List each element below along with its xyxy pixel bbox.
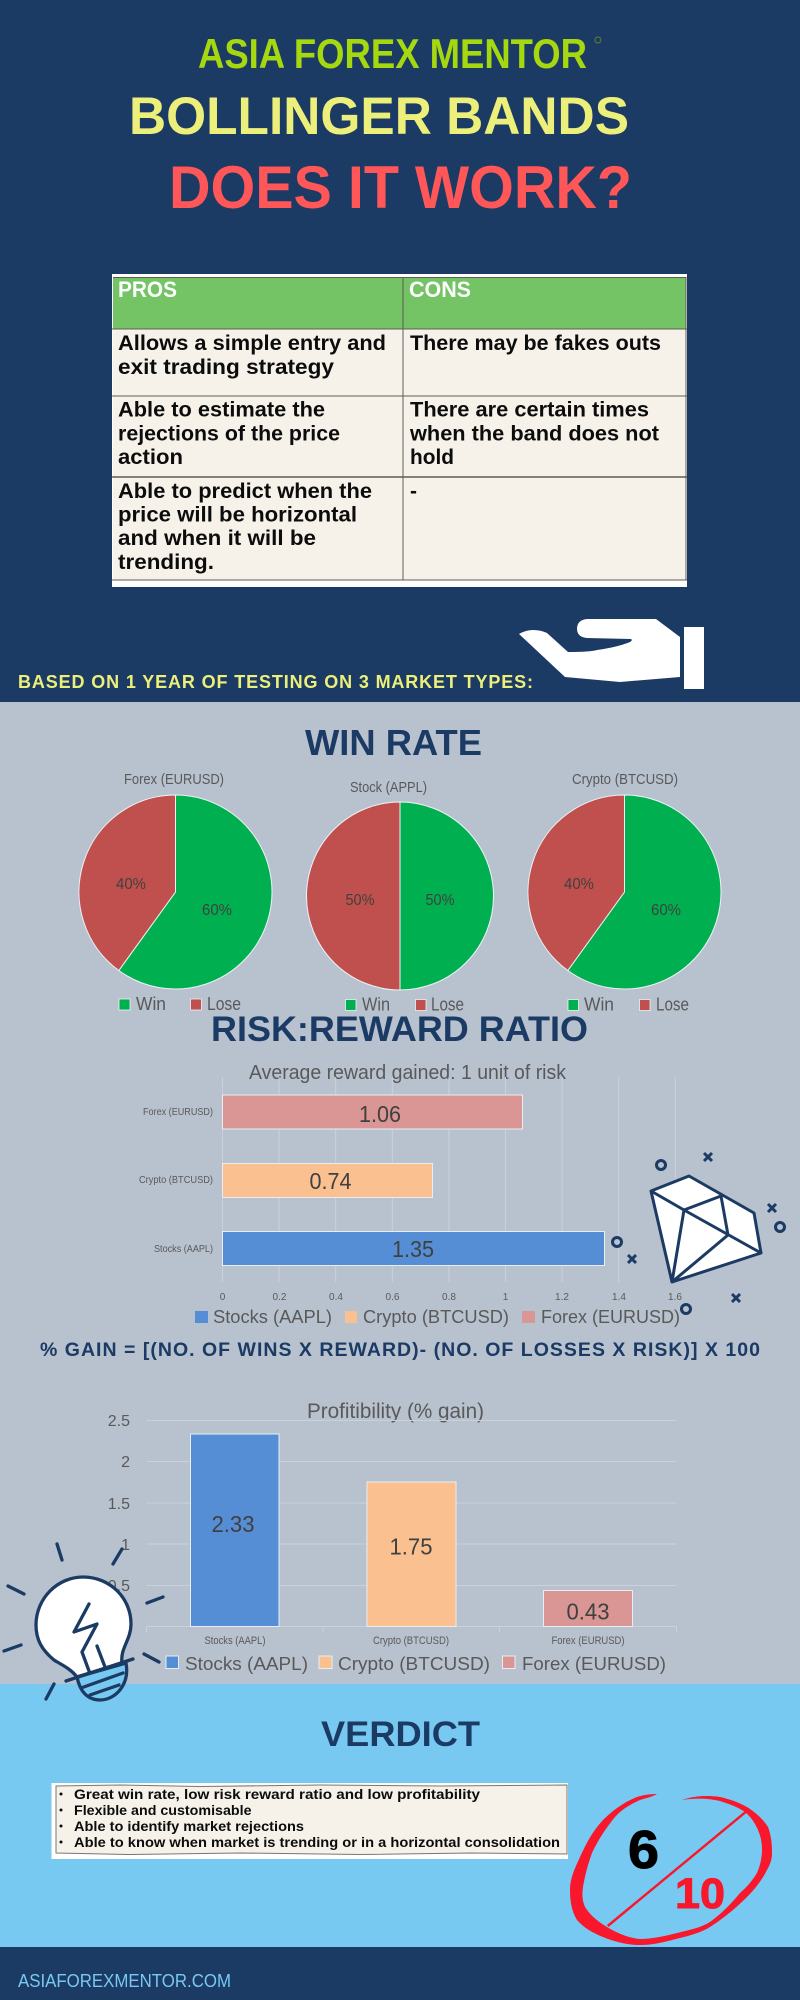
text box: verdict points: Great win rate, low risk reward ratio and low profitability — [74, 1786, 480, 1802]
panel: header background — [0, 0, 800, 702]
bar chart: average reward gained: Stocks (AAPL) — [154, 1243, 213, 1255]
pie chart: Crypto: Crypto (BTCUSD) — [572, 771, 678, 788]
text box: verdict points: Flexible and customisable — [74, 1802, 252, 1818]
title: Bollinger Bands: BOLLINGER BANDS — [129, 87, 629, 146]
heading: win rate: WIN RATE — [305, 722, 482, 763]
bar chart: profitability: Crypto (BTCUSD) — [373, 1635, 449, 1647]
bar chart: profitability: Stocks (AAPL) — [185, 1654, 308, 1674]
bar chart: profitability: 0.43 — [566, 1598, 610, 1624]
bar chart: profitability: Forex (EURUSD) — [552, 1635, 624, 1647]
panel: verdict background — [0, 1684, 800, 1947]
bar chart: profitability: Forex (EURUSD) — [522, 1654, 666, 1674]
pie chart: Stock — [306, 779, 494, 1014]
bar chart: profitability: Profitibility (% gain) — [307, 1400, 484, 1423]
bar chart: profitability: 1.5 — [108, 1496, 130, 1513]
pie chart: Crypto: 40% — [564, 876, 594, 893]
panel: results background — [0, 702, 800, 1684]
pie chart: Stock: 50% — [426, 892, 454, 909]
score: 6 out of 10 — [570, 1794, 772, 1945]
pie chart: Stock: Stock (APPL) — [350, 779, 427, 796]
pie chart: Crypto: 60% — [651, 902, 681, 919]
bar chart: average reward gained: 1.6 — [668, 1292, 682, 1303]
bar chart: average reward gained: 0.6 — [386, 1292, 400, 1303]
bar chart: average reward gained: Forex (EURUSD) — [541, 1307, 680, 1327]
table: pros and cons: trending. — [118, 551, 214, 574]
pie chart: Crypto: Win — [584, 994, 614, 1014]
bar chart: average reward gained: 0.8 — [442, 1292, 456, 1303]
heading: verdict: VERDICT — [321, 1715, 480, 1754]
table: pros and cons: hold — [410, 446, 454, 469]
pie chart: Forex: 40% — [116, 876, 146, 893]
text box: verdict points: Able to know when market is trending or in a horizontal consolidation — [74, 1834, 560, 1850]
bar chart: average reward gained: Crypto (BTCUSD) — [139, 1174, 213, 1186]
table: pros and cons: price will be horizontal — [118, 504, 357, 526]
score: 6 out of 10: 6 — [628, 1820, 659, 1880]
table: pros and cons: Able to predict when the — [118, 480, 372, 503]
table: pros and cons: Able to estimate the — [118, 398, 325, 422]
table: pros and cons: rejections of the price — [118, 422, 340, 446]
bar chart: profitability: 1 — [121, 1537, 130, 1554]
pie chart: Forex: Forex (EURUSD) — [124, 771, 224, 788]
table: pros and cons: when the band does not — [409, 422, 659, 446]
pie chart: Forex — [79, 771, 272, 1014]
bar chart: average reward gained: Stocks (AAPL) — [213, 1307, 332, 1327]
table: pros and cons: action — [118, 446, 183, 469]
table: pros and cons: There are certain times — [410, 398, 649, 422]
bar chart: profitability: 2.5 — [108, 1413, 130, 1430]
text: based on testing: BASED ON 1 YEAR OF TESTING ON 3 MARKET TYPES: — [18, 672, 533, 692]
bar chart: average reward gained: 0.4 — [329, 1292, 343, 1303]
panel: footer background — [0, 1947, 800, 2000]
bar chart: profitability: 1.75 — [390, 1534, 432, 1560]
heading: risk reward ratio: RISK:REWARD RATIO — [211, 1010, 588, 1049]
bar chart: average reward gained: 0 — [220, 1292, 226, 1303]
bar chart: average reward gained: 1.06 — [359, 1101, 401, 1127]
table: pros and cons: - — [410, 480, 417, 503]
pie chart: Forex: Win — [136, 994, 166, 1014]
bar chart: average reward gained: Crypto (BTCUSD) — [363, 1307, 509, 1327]
score: 6 out of 10: 10 — [675, 1870, 725, 1918]
bar chart: profitability: Stocks (AAPL) — [204, 1635, 266, 1647]
bar chart: profitability: Crypto (BTCUSD) — [338, 1654, 490, 1674]
bar chart: average reward gained: Average reward gained: 1 unit of risk — [249, 1062, 567, 1084]
table: pros and cons: and when it will be — [118, 527, 316, 550]
pie chart: Crypto: Lose — [656, 994, 689, 1014]
icon: light bulb — [4, 1544, 163, 1700]
logo: Asia Forex Mentor: ASIA FOREX MENTOR — [198, 30, 587, 77]
text box: verdict points — [52, 1783, 568, 1859]
pie chart: Stock: 50% — [346, 892, 374, 909]
pie chart: Forex: Lose — [207, 994, 241, 1014]
pie chart: Stock: Lose — [431, 994, 464, 1014]
pie chart: Crypto — [528, 771, 721, 1014]
bar chart: profitability: 0.5 — [108, 1578, 130, 1595]
title: Does it work: DOES IT WORK? — [169, 154, 632, 221]
table: pros and cons: exit trading strategy — [118, 356, 334, 379]
text box: verdict points: Able to identify market rejections — [74, 1818, 304, 1834]
icon: open hand — [519, 619, 704, 689]
table: pros and cons: CONS — [409, 277, 471, 302]
footer: website: ASIAFOREXMENTOR.COM — [18, 1971, 231, 1991]
bar chart: average reward gained: Forex (EURUSD) — [143, 1106, 213, 1118]
bar chart: average reward gained: 0.2 — [273, 1292, 287, 1303]
table: pros and cons: PROS — [118, 277, 177, 302]
table: pros and cons: Allows a simple entry and — [118, 332, 386, 355]
bar chart: average reward gained: 1.35 — [392, 1236, 434, 1262]
formula: percent gain: % GAIN = [(NO. OF WINS X REWARD)- (NO. OF LOSSES X RISK)] X 100 — [40, 1339, 760, 1361]
bar chart: average reward gained — [139, 1062, 682, 1327]
table: pros and cons — [112, 274, 687, 587]
bar chart: profitability: 2 — [121, 1454, 130, 1471]
bar chart: profitability — [108, 1400, 676, 1674]
pie chart: Stock: Win — [362, 994, 390, 1014]
bar chart: average reward gained: 1.4 — [612, 1292, 626, 1303]
bar chart: average reward gained: 1.2 — [555, 1292, 569, 1303]
pie chart: Forex: 60% — [202, 902, 232, 919]
icon: diamond with sparkles — [612, 1153, 784, 1314]
bar chart: average reward gained: 1 — [503, 1292, 509, 1303]
bar chart: profitability: 2.33 — [212, 1511, 254, 1537]
table: pros and cons: There may be fakes outs — [410, 332, 661, 355]
bar chart: average reward gained: 0.74 — [310, 1168, 352, 1194]
